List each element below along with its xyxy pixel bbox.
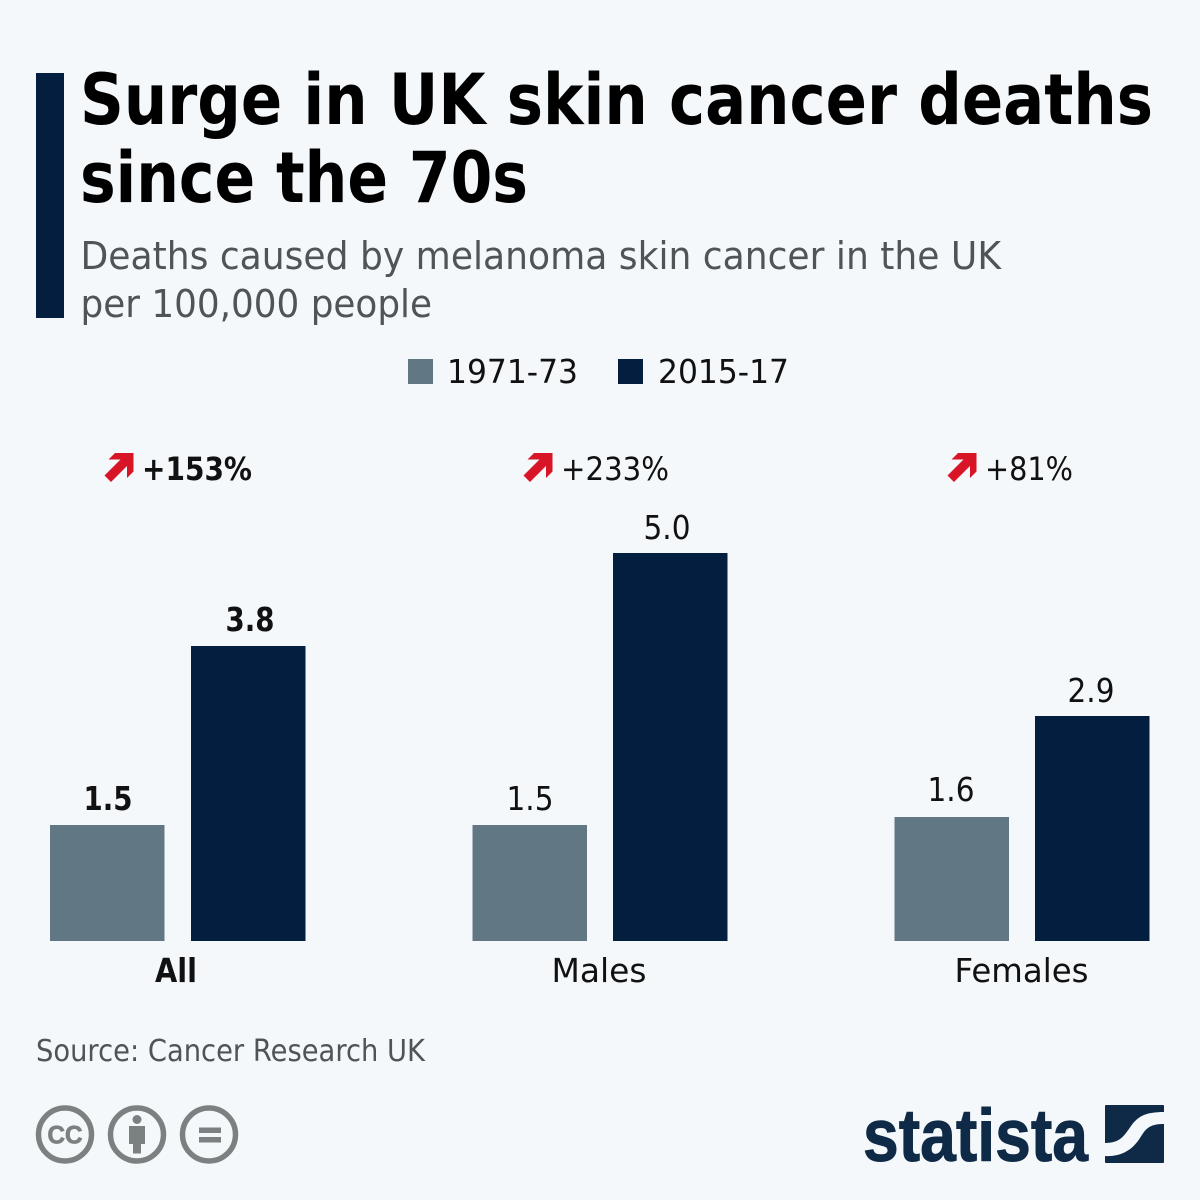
title: since the 70s xyxy=(80,137,528,219)
change label: All xyxy=(104,450,252,488)
legend xyxy=(408,352,789,391)
legend: 1971-73 xyxy=(447,352,578,391)
bar chart: Males xyxy=(472,508,728,990)
icon: cc: CC xyxy=(48,1122,82,1150)
change label: Males: +233% xyxy=(561,450,669,488)
bar chart: Females: 1.6 xyxy=(928,770,974,809)
bar chart: Males: 5.0 xyxy=(644,508,690,547)
bar chart: All: 1.5 xyxy=(84,779,132,818)
change label: Females: +81% xyxy=(985,450,1073,488)
bar chart: All: All xyxy=(155,951,197,990)
bar chart: All: 3.8 xyxy=(226,600,274,639)
title xyxy=(80,59,1153,219)
bar chart: Females: 2.9 xyxy=(1068,671,1114,710)
bar chart: Females xyxy=(894,671,1150,990)
legend: 2015-17 xyxy=(658,352,789,391)
change label: All: +153% xyxy=(142,450,252,488)
source: Source: Cancer Research UK xyxy=(36,1034,426,1069)
icon: attribution xyxy=(110,1108,164,1161)
bar chart: Males: Males xyxy=(552,951,646,990)
statista logo: statista xyxy=(863,1094,1089,1177)
icon: no derivatives xyxy=(182,1108,236,1161)
accent bar xyxy=(36,73,64,318)
icon: cc xyxy=(38,1108,92,1161)
subtitle xyxy=(80,234,1002,326)
subtitle: Deaths caused by melanoma skin cancer in the UK xyxy=(80,234,1002,278)
subtitle: per 100,000 people xyxy=(80,282,432,326)
change label: Males xyxy=(524,450,669,488)
bar chart: Males: 1.5 xyxy=(506,779,554,818)
bar chart: All xyxy=(50,600,306,990)
change label: Females xyxy=(948,450,1073,488)
bar chart: Females: Females xyxy=(954,951,1088,990)
